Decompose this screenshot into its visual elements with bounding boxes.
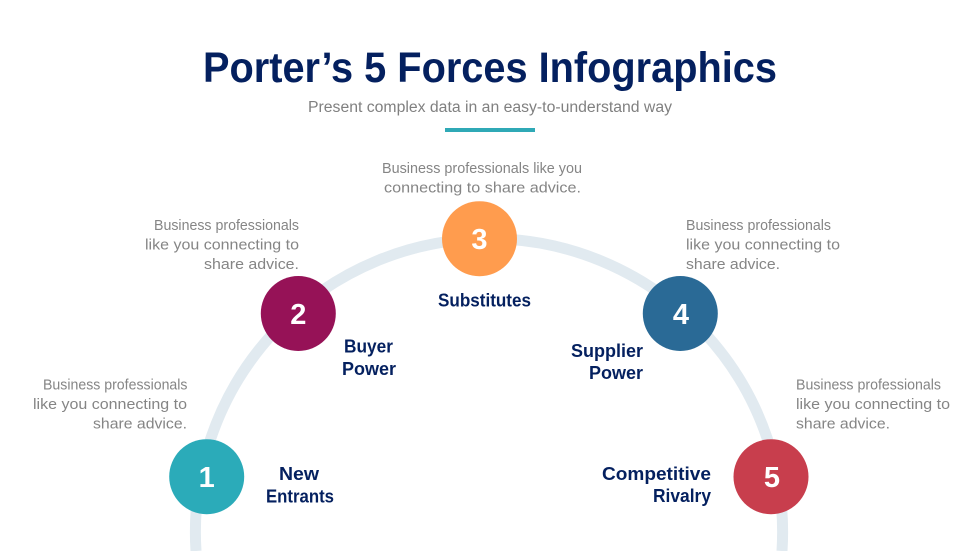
badge 4: 4 <box>673 299 689 331</box>
description 4: like you connecting to <box>686 236 840 254</box>
force 3: substitutes <box>382 160 582 311</box>
force 4: supplier power <box>571 217 840 383</box>
description 2: share advice. <box>204 256 299 273</box>
semicircular arc <box>195 239 783 551</box>
badge 2: 2 <box>290 299 306 331</box>
description 3: Business professionals like you <box>382 160 582 177</box>
label 4: Power <box>589 362 643 383</box>
label 2: Buyer <box>344 336 393 357</box>
badge 1 <box>169 439 244 514</box>
description 4 <box>686 217 840 273</box>
description 4: Business professionals <box>686 217 831 234</box>
subtitle: Present complex data in an easy-to-understand way <box>308 99 672 116</box>
badge 2 <box>261 276 336 351</box>
force 5: competitive rivalry <box>602 376 950 514</box>
badge 1: 1 <box>199 462 215 494</box>
description 5: Business professionals <box>796 376 941 394</box>
label 5: Rivalry <box>653 485 712 506</box>
label 2 <box>342 336 396 379</box>
force 1: new entrants <box>33 376 334 514</box>
badge 3: 3 <box>471 224 488 256</box>
description 1 <box>33 376 188 432</box>
label 4: Supplier <box>571 340 643 361</box>
label 1: Entrants <box>266 486 334 506</box>
description 5: like you connecting to <box>796 396 950 413</box>
description 5 <box>796 376 950 432</box>
title accent underline <box>445 128 535 132</box>
description 1: Business professionals <box>43 376 188 394</box>
description 1: share advice. <box>93 416 187 432</box>
description 2: Business professionals <box>154 217 299 234</box>
badge 5: 5 <box>764 462 780 494</box>
description 4: share advice. <box>686 256 780 273</box>
description 3: connecting to share advice. <box>384 180 581 196</box>
description 2 <box>145 217 299 273</box>
badge 3 <box>442 201 517 276</box>
label 4 <box>571 340 643 383</box>
badge 5 <box>734 439 808 514</box>
description 3 <box>382 160 582 196</box>
label 5: Competitive <box>602 463 711 484</box>
label 1: New <box>279 463 320 484</box>
title: Porter’s 5 Forces Infographics <box>203 44 777 92</box>
badge 4 <box>643 276 718 351</box>
description 5: share advice. <box>796 416 890 432</box>
label 3: Substitutes <box>438 290 531 311</box>
description 2: like you connecting to <box>145 236 299 254</box>
force 2: buyer power <box>145 217 396 379</box>
description 1: like you connecting to <box>33 396 187 413</box>
label 2: Power <box>342 358 396 379</box>
label 5 <box>602 463 712 506</box>
label 1 <box>266 463 334 506</box>
